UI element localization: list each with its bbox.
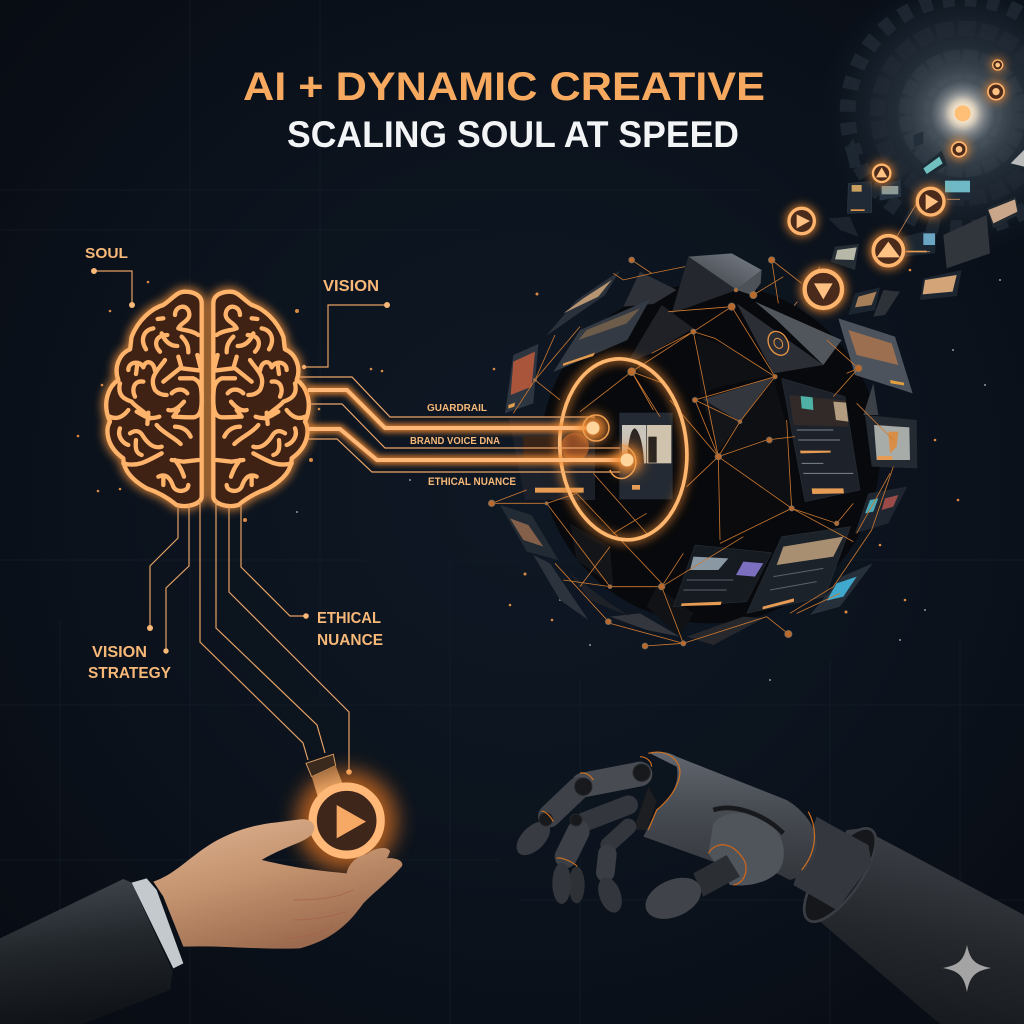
beam labels bbox=[410, 402, 516, 488]
orange joint trim bbox=[542, 752, 814, 870]
card: top right bbox=[838, 318, 913, 393]
orange wire network bbox=[492, 260, 893, 646]
title bbox=[243, 65, 765, 155]
wrist bbox=[793, 817, 872, 910]
lower circuit lines bbox=[147, 500, 352, 775]
brain glow bbox=[106, 292, 309, 506]
forearm sleeve bbox=[792, 818, 1024, 1024]
paint brush connector bbox=[306, 754, 344, 798]
ethical nuance label: NUANCE bbox=[317, 632, 383, 649]
title: AI + DYNAMIC CREATIVE bbox=[243, 65, 765, 109]
brain bbox=[106, 292, 309, 506]
palm bbox=[643, 752, 817, 880]
human hand with play icon bbox=[0, 754, 402, 1024]
card: right centre bbox=[782, 378, 860, 502]
stream glow connectors bbox=[780, 199, 960, 323]
brain to sphere circuit beams bbox=[300, 377, 625, 472]
title: SCALING SOUL AT SPEED bbox=[287, 114, 739, 155]
wire nodes bbox=[488, 257, 862, 649]
beam endpoints bbox=[579, 414, 642, 479]
right hemisphere bbox=[213, 292, 309, 506]
dark facets bbox=[570, 253, 878, 645]
lens ring bbox=[552, 353, 694, 545]
thumb bbox=[639, 808, 784, 927]
soul callout: SOUL bbox=[85, 245, 128, 262]
card: bottom right bbox=[747, 527, 851, 613]
card: top left 1 bbox=[546, 271, 620, 336]
card: bottom left bbox=[500, 505, 558, 560]
data stream swirl bbox=[780, 0, 1024, 323]
card: bottom centre bbox=[673, 545, 772, 607]
hand bbox=[153, 819, 402, 949]
card: top left 2 bbox=[553, 299, 650, 372]
card: bottom left lower bbox=[533, 555, 630, 620]
stream cards bbox=[828, 132, 1024, 317]
card: lens centre left bbox=[508, 417, 595, 500]
card: lens centre bbox=[619, 413, 673, 499]
card: left portrait bbox=[505, 344, 538, 413]
beam labels: ETHICAL NUANCE bbox=[428, 476, 516, 488]
sphere body bbox=[540, 283, 880, 623]
vision callout: VISION bbox=[323, 278, 379, 295]
beam labels: BRAND VOICE DNA bbox=[410, 435, 500, 447]
left hemisphere bbox=[106, 292, 202, 506]
card: right square bbox=[865, 415, 917, 468]
play button bbox=[313, 787, 381, 855]
galaxy core glow bbox=[947, 97, 979, 129]
card: top lens facet bbox=[764, 328, 793, 359]
beam labels: GUARDRAIL bbox=[427, 402, 488, 414]
watermark sparkle bbox=[943, 945, 991, 992]
card: bottom right small bbox=[810, 563, 873, 615]
vision callout bbox=[302, 278, 390, 369]
ethical nuance label: ETHICAL bbox=[317, 610, 381, 627]
play icons bbox=[786, 58, 1006, 312]
vision strategy label bbox=[88, 644, 172, 682]
fingers bbox=[510, 764, 657, 916]
vision strategy label: STRATEGY bbox=[88, 665, 172, 682]
ethical nuance label bbox=[317, 610, 383, 649]
soul callout bbox=[85, 245, 135, 308]
polyhedral sphere of creative cards bbox=[488, 253, 917, 649]
robot hand bbox=[510, 752, 1024, 1024]
card: lower right small bbox=[855, 487, 907, 533]
ring glow bbox=[297, 771, 397, 871]
vision strategy label: VISION bbox=[92, 644, 147, 661]
sleeve bbox=[0, 878, 183, 1024]
